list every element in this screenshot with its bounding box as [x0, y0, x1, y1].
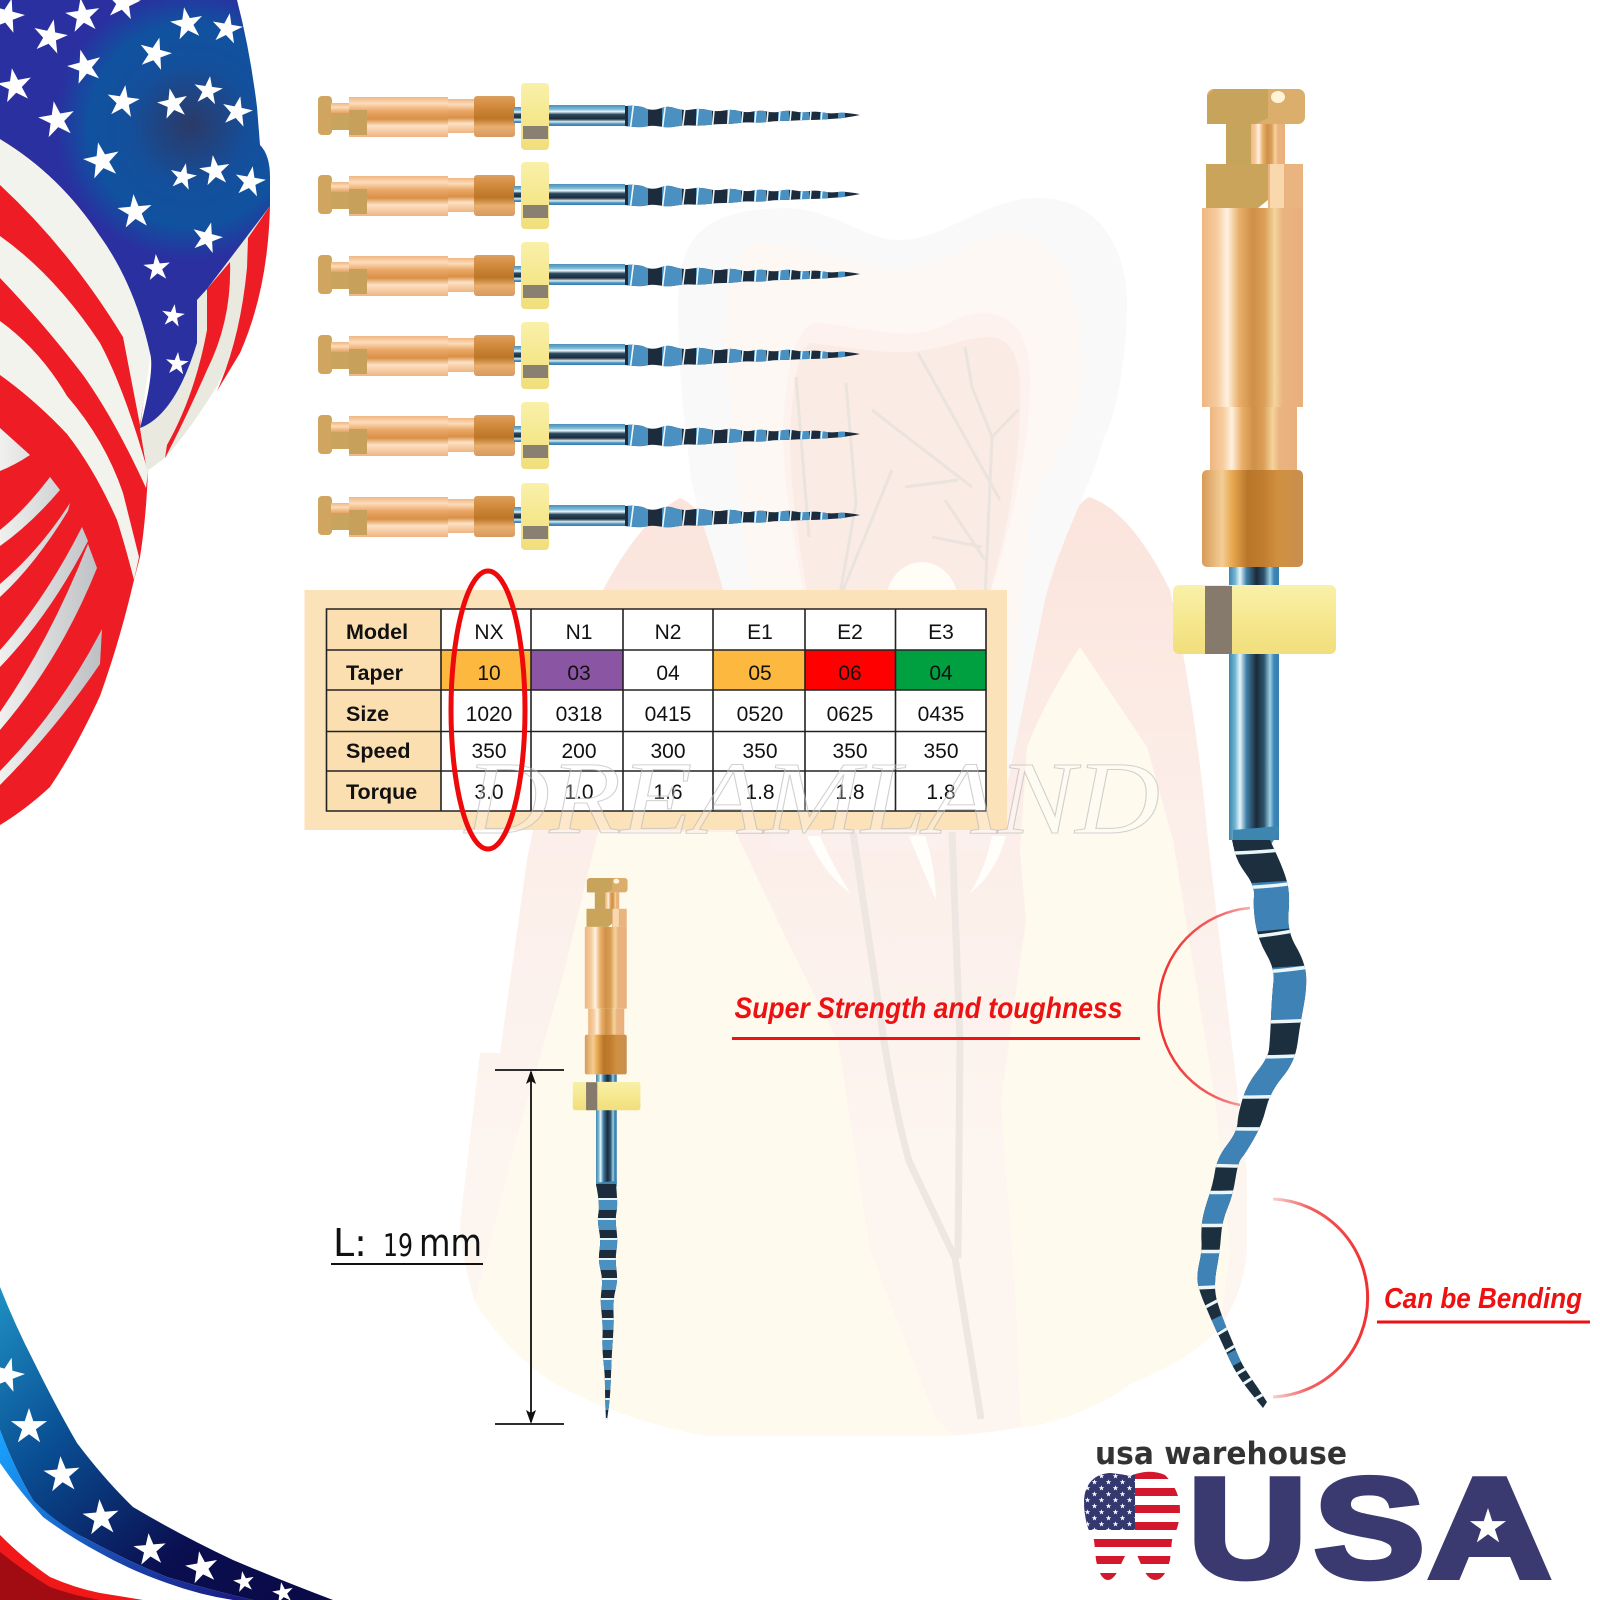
- twisted blade: [1197, 840, 1306, 1408]
- table values: 0520: [737, 703, 783, 726]
- table values: E2: [837, 621, 863, 644]
- file 3: [318, 242, 865, 309]
- table values: 350: [923, 740, 959, 763]
- row labels: Size: [346, 702, 389, 726]
- table values: 1.6: [653, 781, 683, 804]
- table values: 350: [471, 740, 507, 763]
- row labels: Torque: [346, 780, 417, 804]
- table values: 0318: [556, 703, 602, 726]
- canton stars: [0, 0, 268, 375]
- row labels: Model: [346, 620, 408, 644]
- grey shaded stripes: [0, 428, 102, 785]
- row labels: [346, 620, 417, 804]
- right gum cream lobe: [1001, 647, 1230, 1428]
- table values: 1.0: [564, 781, 594, 804]
- white root tips: [807, 836, 1006, 900]
- table values: 3.0: [474, 781, 504, 804]
- table values: 04: [656, 662, 680, 685]
- row of six rotary files: [318, 83, 865, 550]
- right side red stripes: [165, 206, 270, 458]
- length label: [333, 1221, 482, 1265]
- swoosh stars: [0, 1353, 295, 1600]
- dimension: file length: [331, 1070, 564, 1424]
- tooth root silhouette: [460, 497, 1247, 1435]
- flag ribbon: top left: [0, 0, 270, 825]
- flag swoosh: bottom left: [0, 1287, 333, 1600]
- logo: usa warehouse: [1084, 1440, 1552, 1582]
- large file illustration: [1159, 89, 1368, 1415]
- table values: 1020: [466, 703, 512, 726]
- table values: 0435: [918, 703, 964, 726]
- table values: 1.8: [926, 781, 956, 804]
- left gum cream lobe: [475, 832, 955, 1436]
- table values: 10: [477, 662, 501, 685]
- file handle: [573, 878, 640, 1189]
- right side stripes: [140, 206, 270, 471]
- table values: 1.8: [835, 781, 865, 804]
- panel: specification table: [304, 590, 1007, 830]
- length label: L:: [333, 1221, 367, 1265]
- table values: 0625: [827, 703, 873, 726]
- callout arc upper: [1159, 908, 1250, 1105]
- table values: 04: [929, 662, 953, 685]
- row labels: Taper: [346, 661, 404, 685]
- table values: 300: [650, 740, 686, 763]
- file 5: [318, 402, 865, 469]
- A letter star: [1460, 1495, 1516, 1557]
- callout: super strength: Super Strength and toughness: [734, 992, 1122, 1025]
- length label: mm: [419, 1221, 482, 1265]
- callout: super strength: [732, 992, 1140, 1040]
- light blue band: [0, 1430, 253, 1600]
- table values: E3: [928, 621, 954, 644]
- table grid: [326, 609, 986, 811]
- tooth crown dentin: [726, 233, 1081, 820]
- row labels: Speed: [346, 739, 411, 763]
- white stripes: [0, 139, 150, 580]
- pulp pocket: [886, 562, 958, 642]
- table values: N1: [566, 621, 592, 644]
- nerve branches: [796, 347, 1018, 600]
- table values: 03: [567, 662, 591, 685]
- medium file illustration: [573, 878, 640, 1423]
- red stripes base: [0, 139, 150, 825]
- file 4: [318, 322, 865, 389]
- background: pale tooth illustration: [460, 198, 1247, 1436]
- table values: 06: [838, 662, 862, 685]
- blue band: [0, 1287, 333, 1600]
- file 6: [318, 483, 865, 550]
- dimension arrow: [495, 1070, 564, 1424]
- tooth crown enamel: [678, 198, 1127, 820]
- tooth pulp inner: [790, 337, 1020, 610]
- table values: 350: [742, 740, 778, 763]
- warehouse caption: usa warehouse: [1095, 1436, 1347, 1472]
- table values: 05: [748, 662, 772, 685]
- table values: N2: [655, 621, 681, 644]
- table values: [466, 621, 964, 804]
- callout arc lower: [1273, 1199, 1368, 1397]
- callout: can be bending: Can be Bending: [1384, 1283, 1582, 1315]
- label underline: [331, 1263, 483, 1265]
- blue canton: [0, 0, 270, 428]
- red highlight ellipse around NX column: [451, 571, 525, 849]
- root canal lines: [853, 832, 981, 1419]
- file 2: [318, 162, 865, 229]
- icon: flag tooth: [1084, 1472, 1180, 1580]
- value cells: [441, 609, 986, 811]
- label column background: [326, 609, 441, 811]
- table values: 1.8: [745, 781, 775, 804]
- table values: E1: [747, 621, 773, 644]
- pink below crown: [770, 820, 1000, 850]
- table values: 0415: [645, 703, 691, 726]
- dark red band: [0, 1552, 100, 1600]
- table values: 200: [561, 740, 597, 763]
- red band: [0, 1535, 143, 1600]
- tooth pulp outer: [783, 313, 1030, 610]
- watermark: DREAMLAND: [463, 741, 1160, 856]
- length label: 19: [383, 1228, 413, 1264]
- table values: 350: [832, 740, 868, 763]
- taper colour cells: [441, 650, 986, 690]
- USA wordmark: [1188, 1448, 1551, 1600]
- file 1: [318, 83, 865, 150]
- twisted blade: [596, 1184, 618, 1420]
- table values: NX: [474, 621, 504, 644]
- handle and stopper: [1173, 89, 1336, 846]
